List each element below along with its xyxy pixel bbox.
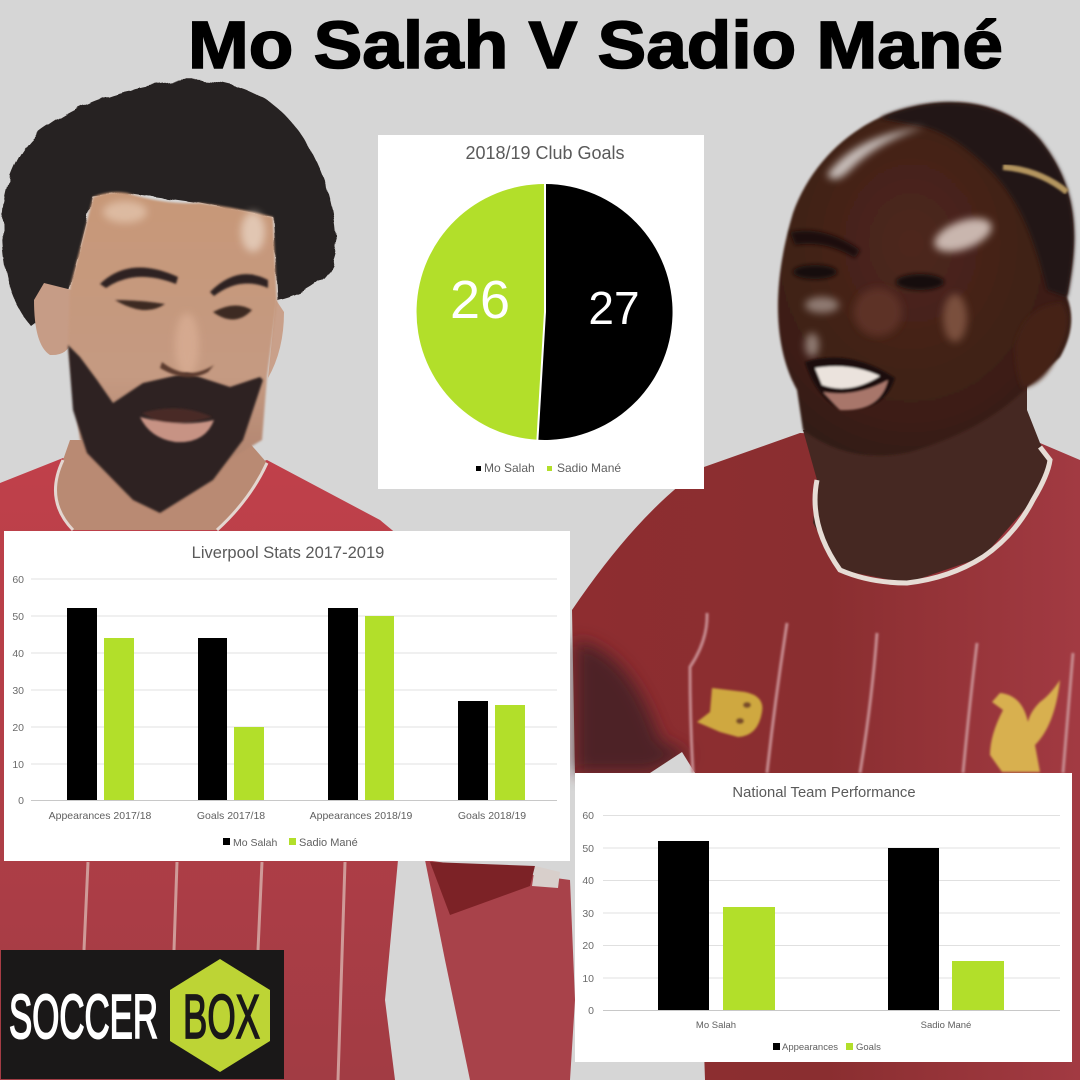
pie legend: Mo Salah <box>484 461 535 475</box>
Salah ear <box>34 283 72 355</box>
pie slice: Sadio Mané 26: 26 <box>450 270 510 330</box>
y axis and gridlines: 30 <box>12 685 24 697</box>
y axis and gridlines: 40 <box>12 648 24 660</box>
logo hexagon: BOX: BOX <box>183 983 260 1052</box>
national y axis and gridlines: 60 <box>582 810 594 822</box>
logo wordmark: SOCCER: SOCCER <box>9 983 158 1052</box>
bar chart title: Liverpool Stats 2017-2019 <box>192 544 384 562</box>
y axis and gridlines: 60 <box>12 574 24 586</box>
Mané mouth <box>805 358 895 410</box>
Salah shirt <box>0 458 575 1080</box>
y axis and gridlines: 20 <box>12 722 24 734</box>
bar chart legend <box>223 837 358 849</box>
bars: Mo Salah national: Mo Salah <box>696 1020 736 1031</box>
y axis and gridlines: 50 <box>12 611 24 623</box>
Mané collar <box>815 447 1050 583</box>
title: Mo Salah V Sadio Mané <box>188 8 1003 83</box>
bars: Sadio Mané national: Sadio Mané <box>921 1020 971 1031</box>
Salah forehead highlights <box>103 201 265 377</box>
national y axis and gridlines <box>582 810 1060 1017</box>
national y axis and gridlines: 40 <box>582 875 594 887</box>
Mané highlights <box>805 127 996 357</box>
Salah right ear <box>268 300 284 378</box>
bars: Goals 2018/19 <box>458 701 526 822</box>
national chart title: National Team Performance <box>732 785 916 801</box>
pie chart title: 2018/19 Club Goals <box>465 143 625 163</box>
y axis and gridlines: 10 <box>12 759 24 771</box>
Salah mouth <box>140 408 214 442</box>
panel: 2018/19 club goals pie chart <box>378 135 704 489</box>
national chart legend: Appearances <box>782 1042 838 1053</box>
bars: Appearances 2018/19: Appearances 2018/19 <box>310 810 413 822</box>
player: Mo Salah <box>0 80 575 1080</box>
bars: Goals 2017/18: Goals 2017/18 <box>197 810 265 822</box>
national chart legend <box>773 1042 881 1053</box>
bars: Mo Salah national <box>658 841 775 1031</box>
Mané hair braid <box>1003 167 1067 192</box>
logo hexagon: BOX <box>170 959 270 1072</box>
national chart legend: Goals <box>856 1042 881 1053</box>
Salah eyes and brows <box>100 268 268 320</box>
bar chart legend: Sadio Mané <box>299 837 358 849</box>
Salah hair <box>2 80 337 325</box>
bars: Appearances 2017/18 <box>49 608 152 822</box>
national y axis and gridlines: 10 <box>582 973 594 985</box>
pie slice: Sadio Mané 26 <box>417 184 545 440</box>
bars: Appearances 2018/19 <box>310 608 413 822</box>
pie slice: Mo Salah 27: 27 <box>588 282 640 334</box>
national y axis and gridlines: 30 <box>582 908 594 920</box>
panel: Liverpool stats bar chart <box>4 531 570 861</box>
bars: Goals 2018/19: Goals 2018/19 <box>458 810 526 822</box>
Mané ear <box>1015 303 1068 388</box>
y axis and gridlines <box>12 574 557 807</box>
Salah neck <box>55 440 267 530</box>
pie legend: Sadio Mané <box>557 461 621 475</box>
Mané neck <box>803 380 1050 583</box>
bar chart legend: Mo Salah <box>233 837 278 849</box>
national y axis and gridlines: 20 <box>582 940 594 952</box>
New Balance badge <box>697 688 762 737</box>
logo: Soccer Box <box>1 950 284 1079</box>
Mané head <box>778 102 1074 456</box>
pie legend <box>476 461 621 475</box>
Salah face <box>68 192 277 500</box>
national y axis and gridlines: 0 <box>588 1005 594 1017</box>
pie slice: Mo Salah 27 <box>537 184 673 440</box>
national y axis and gridlines: 50 <box>582 843 594 855</box>
Salah nose shadow <box>160 362 214 377</box>
Salah collar <box>55 460 267 530</box>
panel: national team performance bar chart <box>575 773 1072 1062</box>
player: Sadio Mané <box>572 102 1080 1080</box>
Liverpool crest <box>990 680 1060 772</box>
Mané shirt <box>572 433 1080 1080</box>
Mané hair <box>880 103 1074 297</box>
y axis and gridlines: 0 <box>18 795 24 807</box>
bars: Appearances 2017/18: Appearances 2017/18 <box>49 810 152 822</box>
bars: Goals 2017/18 <box>197 638 265 822</box>
Salah beard <box>68 345 263 513</box>
bars: Sadio Mané national <box>888 848 1004 1031</box>
Mané eyes and brows <box>790 230 944 290</box>
